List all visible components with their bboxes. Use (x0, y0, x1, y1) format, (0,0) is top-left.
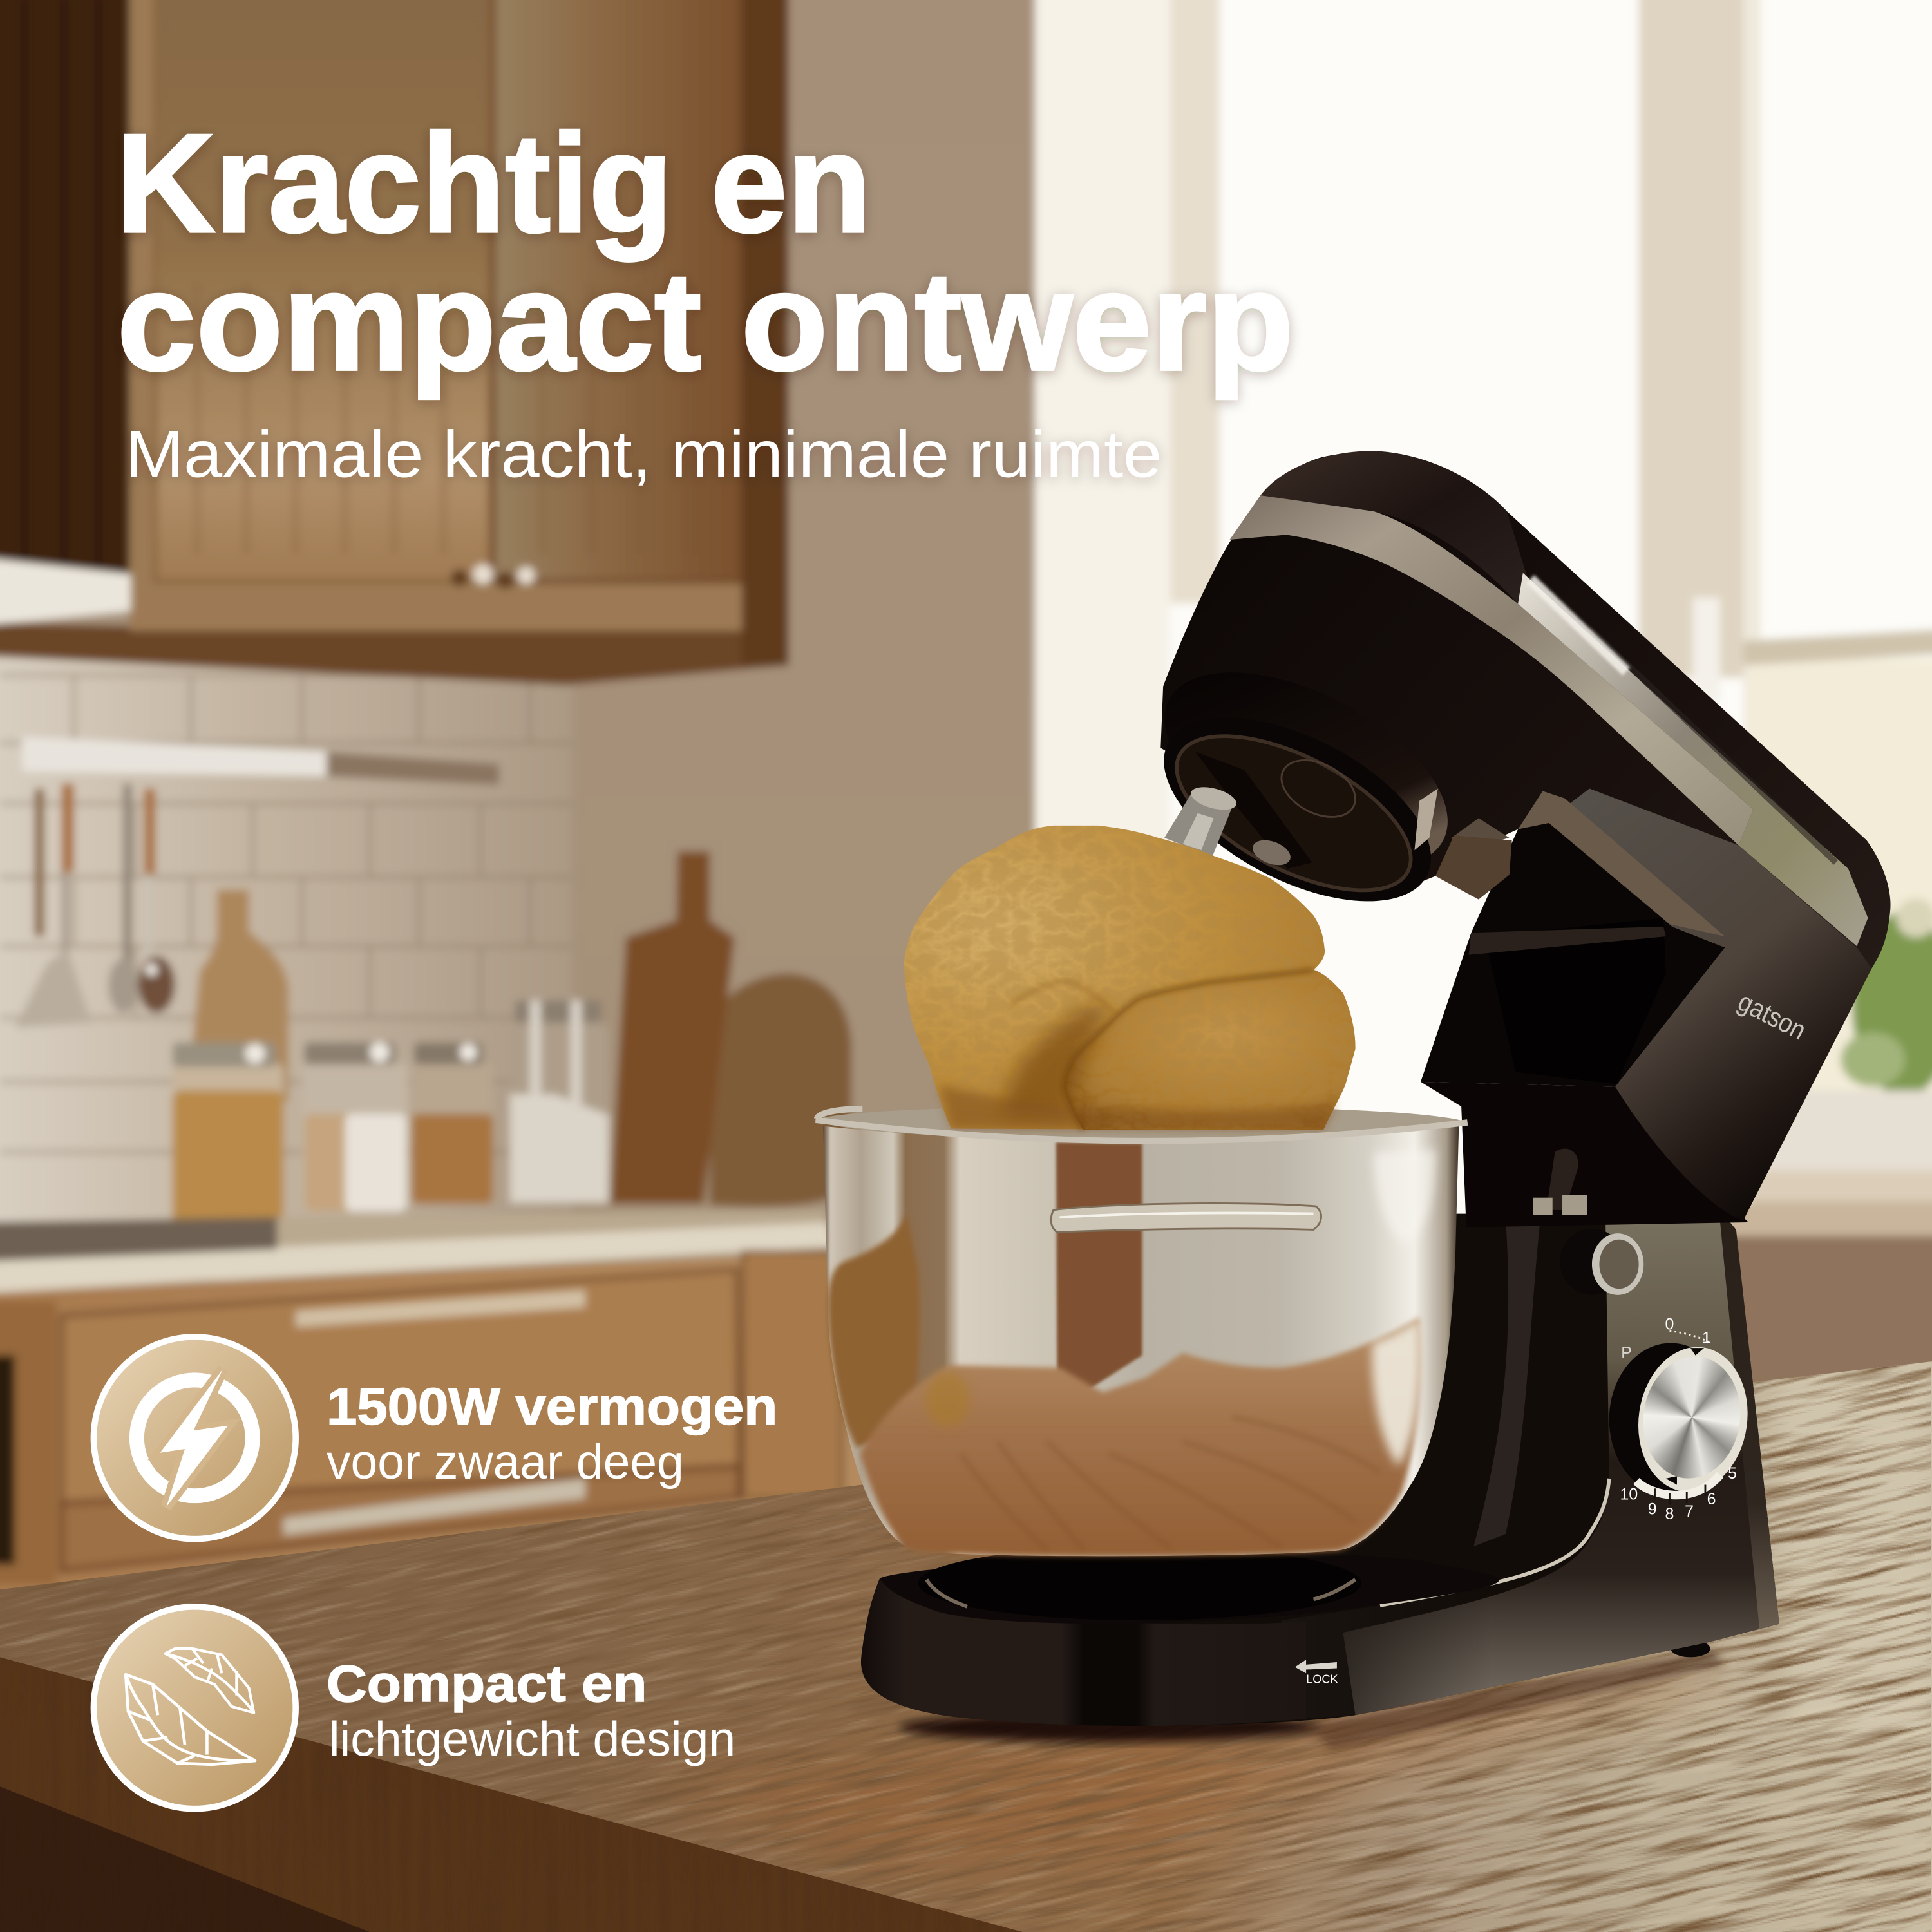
base plate (880, 1554, 1499, 1624)
speed scale: 5 (1728, 1464, 1737, 1482)
title: compact ontwerp (117, 243, 1294, 400)
speed scale: 8 (1665, 1505, 1674, 1523)
mixer rear foot (1671, 1640, 1710, 1657)
dough lower lobe (1063, 970, 1356, 1130)
brand name: gatson (1734, 986, 1811, 1045)
cabinet shelf bottom (0, 622, 788, 685)
subtitle: Maximale kracht, minimale ruimte (126, 416, 1162, 491)
left wood reflection (828, 1214, 920, 1448)
bolt on underside (1249, 835, 1294, 870)
stand mixer (815, 451, 1891, 1726)
speed scale (1620, 1315, 1737, 1523)
wall (0, 0, 1047, 1282)
gloss dark line (1589, 629, 1836, 862)
speed scale: 10 (1620, 1485, 1638, 1503)
speed dial brushed metal face (1636, 1350, 1748, 1485)
window sill and wall right (1725, 1090, 1932, 1386)
column gloss strip (1473, 1220, 1540, 1546)
head of the mixer (1134, 451, 1891, 1227)
hanging utensils (15, 784, 175, 1028)
jars white and amber (302, 1043, 493, 1213)
wooden table top (0, 1356, 1932, 1932)
plant on sill (1841, 898, 1932, 1097)
upper gloss band (1518, 573, 1868, 946)
reflected wood grain (961, 1417, 1380, 1550)
bowl brown band (1056, 1142, 1142, 1392)
kitchen counter (0, 1220, 838, 1294)
gold spot reflection (925, 1372, 970, 1427)
speed scale: 1 (1702, 1329, 1711, 1347)
pivot lever (1546, 1149, 1578, 1210)
speed scale: 6 (1707, 1490, 1716, 1508)
lock arrow (1295, 1660, 1338, 1686)
dough crease (1010, 981, 1116, 1013)
bowl interior (815, 1106, 1468, 1140)
disc blade (1195, 752, 1312, 869)
table front edge (0, 1657, 1023, 1932)
feature: power (93, 1337, 777, 1539)
icon: lightning in ring (93, 1337, 296, 1539)
wooden boards (610, 851, 851, 1207)
head top dome (1260, 451, 1528, 604)
compact text: Compact en (327, 1655, 647, 1713)
dial pointers (1666, 1348, 1704, 1484)
silver stripe (1229, 495, 1754, 845)
vent (1452, 818, 1510, 850)
cutting board small (187, 889, 289, 1101)
dough upper lobe (904, 826, 1356, 1130)
mixing bowl (816, 1109, 1468, 1556)
dough (904, 826, 1356, 1130)
collar (1134, 632, 1478, 908)
head body (1160, 453, 1891, 1220)
wooden cabinet (129, 0, 788, 665)
compact text (327, 1655, 735, 1766)
tiled backsplash (0, 629, 573, 1244)
collar glint (1414, 788, 1438, 850)
feature: compact (93, 1607, 735, 1809)
dough fold line (1063, 970, 1314, 1130)
base highlight (1380, 1479, 1609, 1605)
panel to foot blend (1282, 1589, 1491, 1720)
utensil rail (22, 737, 499, 785)
bright top highlight (1374, 1150, 1435, 1244)
bowl seat (918, 1546, 1361, 1620)
gloss white highlight (1530, 579, 1627, 672)
rust band on table (753, 1642, 1734, 1852)
speed dial ring (1629, 1340, 1757, 1499)
speed scale: 9 (1648, 1500, 1657, 1518)
power text (327, 1378, 777, 1490)
beater shaft (1164, 783, 1239, 857)
neck inner reflection (1518, 791, 1725, 936)
lower cabinets (0, 1249, 887, 1602)
lock arrow: LOCK (1306, 1673, 1338, 1686)
disc reflection (1272, 749, 1365, 828)
light wood right of mixer (1777, 1368, 1918, 1732)
speed scale: 0 (1665, 1315, 1674, 1333)
bowl rim (816, 1109, 1468, 1141)
small lever knob (1560, 1229, 1643, 1295)
underside disc (1154, 705, 1434, 922)
neck back (1421, 819, 1725, 1087)
jar grain (173, 1043, 283, 1244)
neck lower pivot (1421, 1082, 1748, 1227)
speed dial base (1609, 1343, 1732, 1496)
dough wrinkles (904, 826, 1356, 1130)
pivot silver caps (1533, 1195, 1587, 1215)
bottom feather (126, 1674, 255, 1765)
under-cabinet light (0, 557, 131, 626)
mixer column and foot (861, 1209, 1779, 1726)
dough and table reflection (860, 1317, 1421, 1556)
seat glints (927, 1580, 1356, 1607)
neck side panel (1549, 788, 1871, 1220)
cabinet knobs (451, 564, 535, 589)
speed scale: 7 (1685, 1502, 1694, 1520)
table grain (0, 1361, 1932, 1932)
bowl handle (1051, 1203, 1321, 1232)
neck inner glow (1484, 918, 1666, 1084)
brown reflection under collar (1435, 835, 1512, 900)
compact text: lichtgewicht design (329, 1712, 735, 1766)
power text: voor zwaar deeg (327, 1435, 684, 1490)
base foot front (861, 1580, 1306, 1726)
panel right edge strip (1719, 1209, 1779, 1629)
jar clear (510, 1001, 609, 1202)
top feather (165, 1649, 254, 1712)
upper cabinet dark (0, 0, 129, 579)
title: Krachtig en (116, 106, 871, 262)
mixer shadow on table (900, 1649, 1725, 1750)
power text: 1500W vermogen (327, 1378, 777, 1436)
dough shadow along fold (1004, 1004, 1109, 1115)
collar rim (1135, 680, 1459, 939)
dough bottom shade (939, 1084, 1336, 1130)
speed scale: P (1621, 1343, 1632, 1361)
title (116, 106, 1294, 400)
metallic side panel (1343, 1209, 1779, 1715)
icon: feathers (93, 1607, 296, 1809)
window opening (1035, 0, 1932, 1232)
bright right highlight (1372, 1318, 1421, 1466)
bowl body (823, 1126, 1459, 1556)
